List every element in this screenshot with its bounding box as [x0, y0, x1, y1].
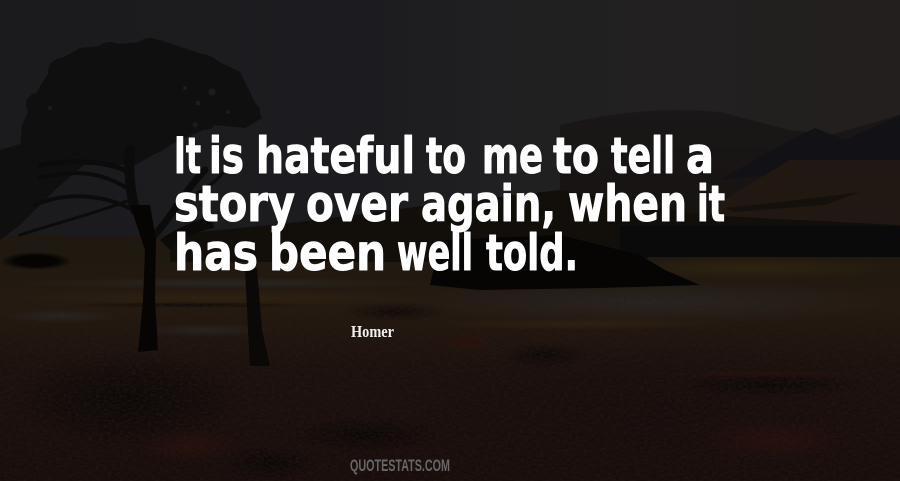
quote line 2: when: [568, 175, 687, 233]
watermark: QUOTESTATS.COM: [350, 457, 450, 475]
background: lake right: [600, 256, 900, 280]
background: left water strip: [0, 277, 450, 289]
quote line 2: again,: [421, 175, 556, 233]
tree light flecks: [48, 86, 230, 128]
background: ground: [0, 235, 900, 481]
quote line 1: It: [174, 127, 201, 185]
tree limb to second trunk: [160, 215, 214, 250]
background: lake water: [400, 280, 900, 324]
quote line 1: a: [686, 127, 714, 185]
background: left dark bank: [0, 252, 72, 270]
quote line 1: is: [209, 127, 244, 185]
icon: tree: [0, 38, 262, 352]
background: grass texture: [0, 290, 900, 481]
quote line 2: [174, 175, 725, 233]
background: far tree line: [170, 190, 900, 262]
background: dark island: [430, 235, 700, 290]
quote line 3: told.: [486, 224, 578, 282]
quote: [174, 127, 725, 282]
quote line 3: [174, 224, 578, 282]
tree branches: [20, 150, 225, 240]
quote line 3: well: [397, 224, 473, 282]
background: foreground shadows: [10, 350, 845, 480]
background: sky: [0, 0, 900, 260]
quote line 2: over: [306, 175, 408, 233]
icon: second tree trunk: [245, 268, 270, 366]
quote line 2: story: [174, 175, 295, 233]
quote line 1: me: [482, 127, 543, 185]
background: far tree line right: [620, 226, 900, 257]
quote line 1: [174, 127, 714, 185]
author: Homer: [351, 322, 394, 341]
quote line 1: to: [553, 127, 599, 185]
quote line 1: hateful: [256, 127, 415, 185]
tree main trunk: [130, 205, 158, 352]
quote line 3: been: [269, 224, 386, 282]
background: mountains: [560, 110, 900, 240]
background: right ground tint: [400, 340, 900, 480]
quote line 3: has: [174, 224, 258, 282]
quote line 2: it: [697, 175, 725, 233]
background: meadow bands: [0, 289, 880, 397]
quote line 1: tell: [611, 127, 675, 185]
tree foliage: [0, 38, 262, 240]
quote line 1: to: [426, 127, 466, 185]
